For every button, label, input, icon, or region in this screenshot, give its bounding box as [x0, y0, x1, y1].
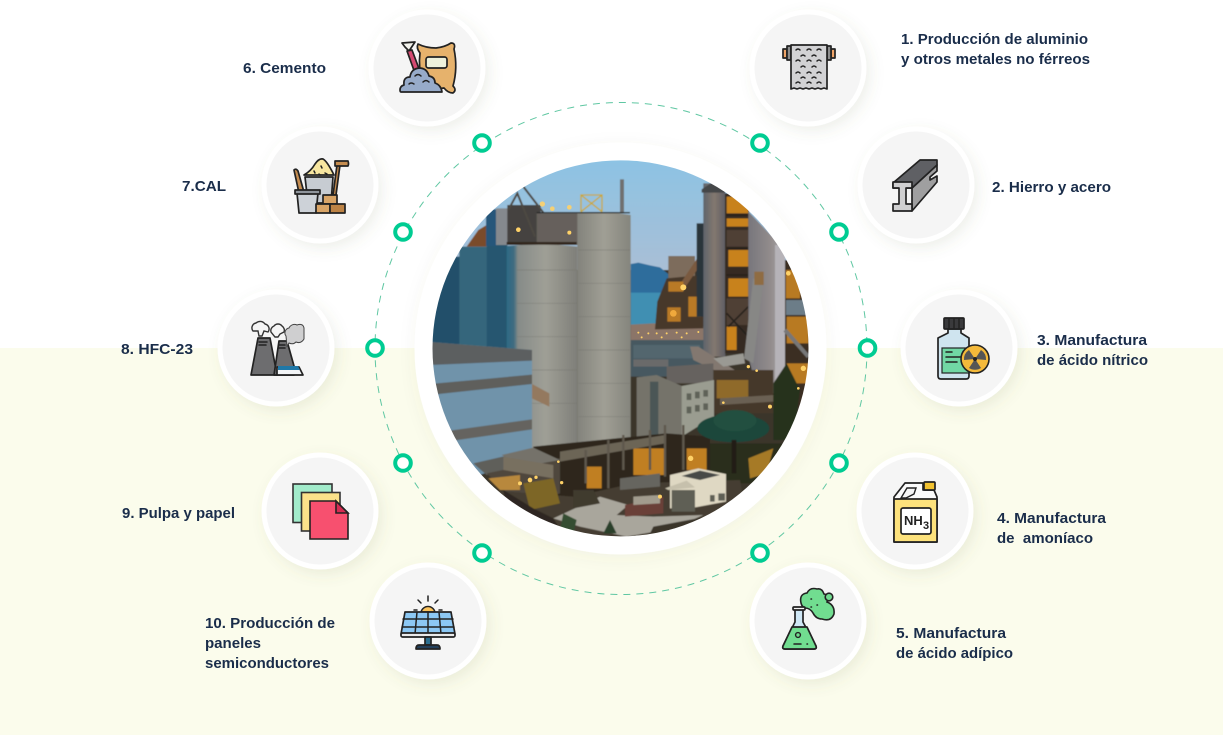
label: 4. Manufactura de amoníaco: 4. Manufactura: [997, 510, 1107, 527]
item 10: solar panel icon: [370, 562, 486, 680]
left clad building: [430, 342, 532, 475]
label: 10. Producción de paneles semiconductores: 10. Producción de: [205, 615, 335, 632]
water: [630, 292, 662, 326]
label: 5. Manufactura de ácido adípico: de ácido adípico: [896, 645, 1013, 662]
lower lit plant zone: [713, 370, 773, 413]
label: 3. Manufactura de ácido nítrico: [1037, 332, 1148, 369]
label: 10. Producción de paneles semiconductores: semiconductores: [205, 655, 329, 672]
label: 7.CAL: 7.CAL: [182, 178, 226, 195]
small hut lower left: [487, 458, 560, 494]
foreground clutter: [573, 490, 600, 508]
item 2: steel beam icon: [858, 126, 974, 244]
label: 1. Producción de aluminio y otros metales no férreos: [901, 31, 1090, 68]
label: 2. Hierro y acero: 2. Hierro y acero: [992, 179, 1111, 196]
middle background plant: [631, 340, 707, 377]
background: lower cream band: [0, 348, 1223, 735]
label: 3. Manufactura de ácido nítrico: de ácido nítrico: [1037, 352, 1148, 369]
item 9: paper sheets icon: [262, 452, 378, 570]
label: 5. Manufactura de ácido adípico: 5. Manufactura: [896, 625, 1007, 642]
foreground ground: [500, 480, 742, 536]
label: 4. Manufactura de amoníaco: de amoníaco: [997, 530, 1093, 547]
item 7: lime icon: [262, 126, 378, 244]
far right orange plant: [774, 260, 805, 399]
label: 3. Manufactura de ácido nítrico: 3. Manufactura: [1037, 332, 1148, 349]
blue silos left: [432, 256, 460, 344]
crane and frame: [510, 186, 544, 213]
large pipe: [744, 281, 757, 362]
right trees and lit zone: [773, 363, 800, 440]
tall concrete tower right: [748, 212, 778, 384]
dashed orbit ring: [375, 102, 867, 594]
rust-coloured conveyor structure: [668, 256, 695, 282]
roof of mid building: [667, 363, 713, 383]
label: 9. Pulpa y papel: 9. Pulpa y papel: [122, 505, 235, 522]
mountain: [631, 263, 668, 293]
central photo: cement plant at dusk: [430, 157, 813, 550]
item 1: aluminium foil icon: [750, 10, 866, 126]
item 8: HFC-23 plant icon: [218, 290, 334, 406]
item 4: ammonia jug icon: NH: [904, 513, 923, 528]
item 5: adipic acid flask icon: [750, 562, 866, 680]
shoreline: [631, 323, 707, 343]
orange lattice: [725, 193, 749, 353]
item 4: ammonia jug icon: [856, 452, 974, 570]
dark tower back: [696, 222, 704, 318]
left tower: [703, 183, 725, 357]
label: 5. Manufactura de ácido adípico: [896, 625, 1013, 662]
label: 6. Cemento: 6. Cemento: [243, 60, 326, 77]
item 4: ammonia jug icon: 3: [923, 520, 929, 532]
label: 4. Manufactura de amoníaco: [997, 510, 1107, 547]
label: 1. Producción de aluminio y otros metales no férreos: y otros metales no férreos: [901, 51, 1090, 68]
tree: [697, 414, 769, 442]
front silo: [507, 244, 577, 453]
base: [480, 269, 800, 492]
pipe gantry: [533, 433, 710, 503]
plant lights: [516, 201, 806, 499]
silo rings: [526, 250, 616, 417]
label: 10. Producción de paneles semiconductores: [205, 615, 335, 672]
item 3: nitric acid bottle icon: [900, 290, 1018, 406]
white building: [670, 468, 726, 508]
orbit nodes: [367, 135, 875, 561]
item 6: cement icon: [368, 10, 486, 126]
label: 10. Producción de paneles semiconductores: paneles: [205, 635, 261, 652]
label: 1. Producción de aluminio y otros metales no férreos: 1. Producción de aluminio: [901, 31, 1088, 48]
mid building: [637, 375, 683, 437]
sky: [456, 160, 787, 271]
central white ring: [414, 142, 826, 554]
upper works on silos: [467, 225, 487, 247]
rear silo: [577, 212, 631, 452]
label: 8. HFC-23: 8. HFC-23: [121, 341, 193, 358]
